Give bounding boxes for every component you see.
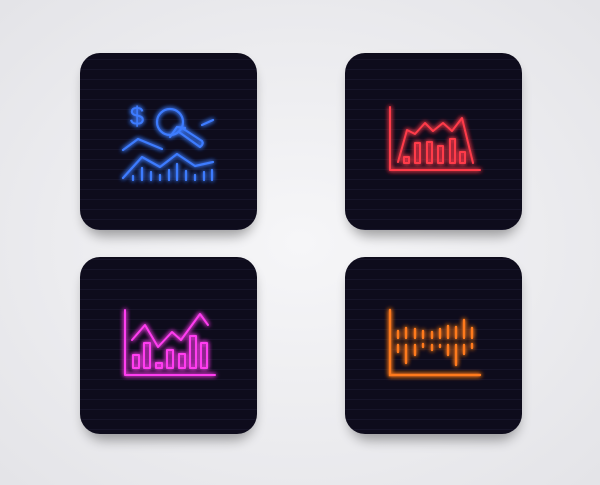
panel: purple chart tile	[80, 257, 257, 434]
icon: orange candlestick bars	[390, 310, 480, 375]
panel: search dollar tile	[80, 53, 257, 230]
panel: orange bars tile	[345, 257, 522, 434]
icon: blue finance search	[123, 101, 213, 180]
icon: red line and bar chart	[390, 107, 480, 170]
icon: blue finance search: $	[130, 101, 145, 131]
panel: tile shadows	[84, 62, 519, 440]
panel: red chart tile	[345, 53, 522, 230]
icon: purple line bar chart	[125, 310, 215, 375]
